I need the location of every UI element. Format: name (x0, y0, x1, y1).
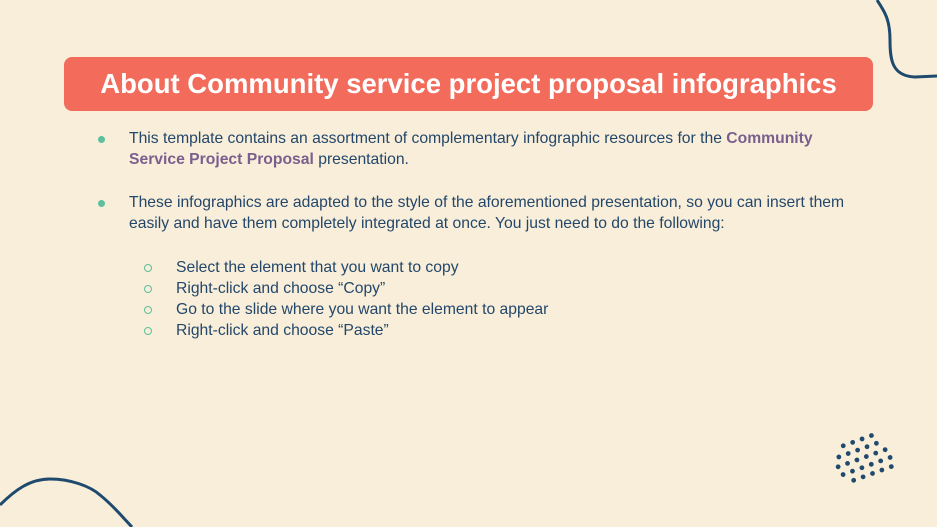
bullet list (98, 130, 844, 339)
bullet list: This template contains an assortment of complementary infographic resources for the Community (129, 130, 813, 147)
title banner (64, 57, 873, 111)
bullet list: Right-click and choose “Paste” (176, 322, 389, 339)
bullet list: Service Project Proposal presentation. (129, 151, 409, 168)
title banner: About Community service project proposal infographics (100, 68, 837, 99)
bullet list: Select the element that you want to copy (176, 259, 459, 276)
bullet list: Go to the slide where you want the element to appear (176, 301, 548, 318)
bullet list: These infographics are adapted to the style of the aforementioned presentation, so you can insert them (129, 194, 844, 211)
decorative dots (836, 433, 894, 483)
bullet list: easily and have them completely integrated at once. You just need to do the following: (129, 215, 725, 232)
bullet list: Right-click and choose “Copy” (176, 280, 385, 297)
